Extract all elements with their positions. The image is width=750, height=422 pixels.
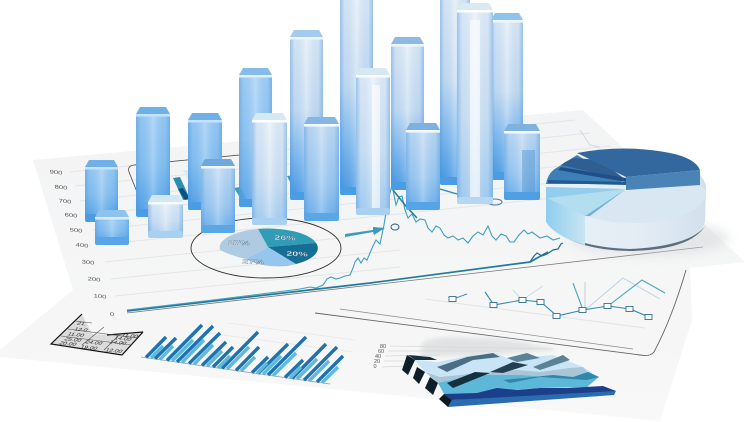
data table: 12.00: [104, 348, 124, 354]
y axis labels: 700: [59, 198, 72, 205]
data table: 14.00: [113, 336, 133, 342]
data table: 19.00: [79, 345, 99, 351]
front glass bars: [95, 3, 540, 245]
bar: [252, 113, 287, 225]
bar: [304, 117, 339, 221]
pie slice: pale blue: [547, 189, 626, 216]
pie slice: 26%: [258, 229, 316, 247]
pale back band: [415, 354, 593, 377]
pie slice: 27%: [220, 229, 268, 259]
marker line chart: [425, 278, 665, 328]
y axis labels: 300: [82, 259, 95, 266]
y axis labels: 200: [88, 276, 101, 283]
pie slice: large pale: [585, 183, 706, 223]
back glass bars: [85, 0, 523, 222]
axis grid lines: [70, 120, 660, 296]
area axis lines and labels: [382, 346, 553, 367]
pie slice: large dark raised: [577, 148, 700, 177]
data table: 12.0: [73, 327, 89, 333]
light bars: [151, 340, 338, 383]
bar: [504, 124, 540, 200]
y axis labels: 500: [70, 227, 83, 234]
bar: [406, 123, 440, 210]
data table: 11.00: [66, 332, 86, 338]
grey band: [425, 367, 588, 383]
circled pie chart: 27%: [242, 258, 264, 266]
data table: 25.00: [63, 337, 83, 343]
y axis labels: [50, 169, 115, 318]
data table: [51, 314, 143, 355]
pie slice: 27% lower: [246, 247, 296, 266]
data table: 20.00: [58, 341, 78, 347]
circled pie chart: 27%: [228, 239, 250, 247]
y axis labels: 100: [94, 293, 107, 300]
bar: [239, 68, 272, 207]
bar: [491, 13, 523, 180]
rounded panel outline with stripes: [129, 155, 306, 204]
bar: [85, 160, 118, 222]
pie shadow: [570, 220, 730, 256]
area end caps: [402, 355, 415, 375]
y axis labels: 600: [65, 212, 78, 219]
3D area chart: [373, 337, 616, 407]
pie slice: mid blue: [546, 155, 626, 184]
band top shading: [408, 355, 437, 360]
data table: 11.00: [120, 333, 140, 339]
3D area chart: 20: [374, 359, 380, 365]
paper sheets: [0, 110, 745, 421]
y axis labels: 800: [55, 184, 68, 191]
circled pie chart: 26%: [274, 234, 296, 242]
bar: [356, 68, 390, 215]
bar: [440, 0, 470, 185]
bar: [391, 37, 424, 190]
circled pie chart: [191, 218, 341, 278]
bar: [457, 3, 493, 204]
sheet with rounded corner: [315, 270, 686, 356]
bar: [290, 30, 323, 200]
y axis labels: 0: [110, 312, 115, 318]
navy band: [444, 386, 616, 400]
data table: 24.00: [84, 340, 104, 346]
bar: [148, 195, 183, 238]
bar: [188, 113, 222, 210]
3D pie chart: [546, 148, 730, 256]
data table: 21.: [75, 322, 88, 327]
bar: [201, 159, 235, 233]
3D area chart: 80: [380, 344, 386, 350]
pie wedge side: [546, 188, 585, 245]
bar: [95, 210, 129, 245]
line chart: baseline and jagged series: [127, 130, 703, 313]
circled pie chart: 20%: [286, 250, 308, 258]
grouped bar chart: [141, 323, 355, 384]
3D area chart: 40: [375, 354, 381, 360]
dark bars: [146, 325, 343, 382]
arrow: [345, 199, 502, 237]
cyan band: [438, 372, 599, 395]
y axis labels: 400: [76, 242, 89, 249]
y axis labels: 900: [50, 169, 63, 176]
bar: [340, 0, 373, 195]
bar: [136, 107, 170, 217]
3D area chart: 0: [373, 364, 377, 370]
pie body: [546, 152, 706, 249]
data table: 14.00: [108, 340, 128, 346]
pie slice: 20%: [268, 243, 318, 264]
3D area chart: 60: [378, 349, 384, 355]
area chart shadow: [420, 337, 560, 356]
